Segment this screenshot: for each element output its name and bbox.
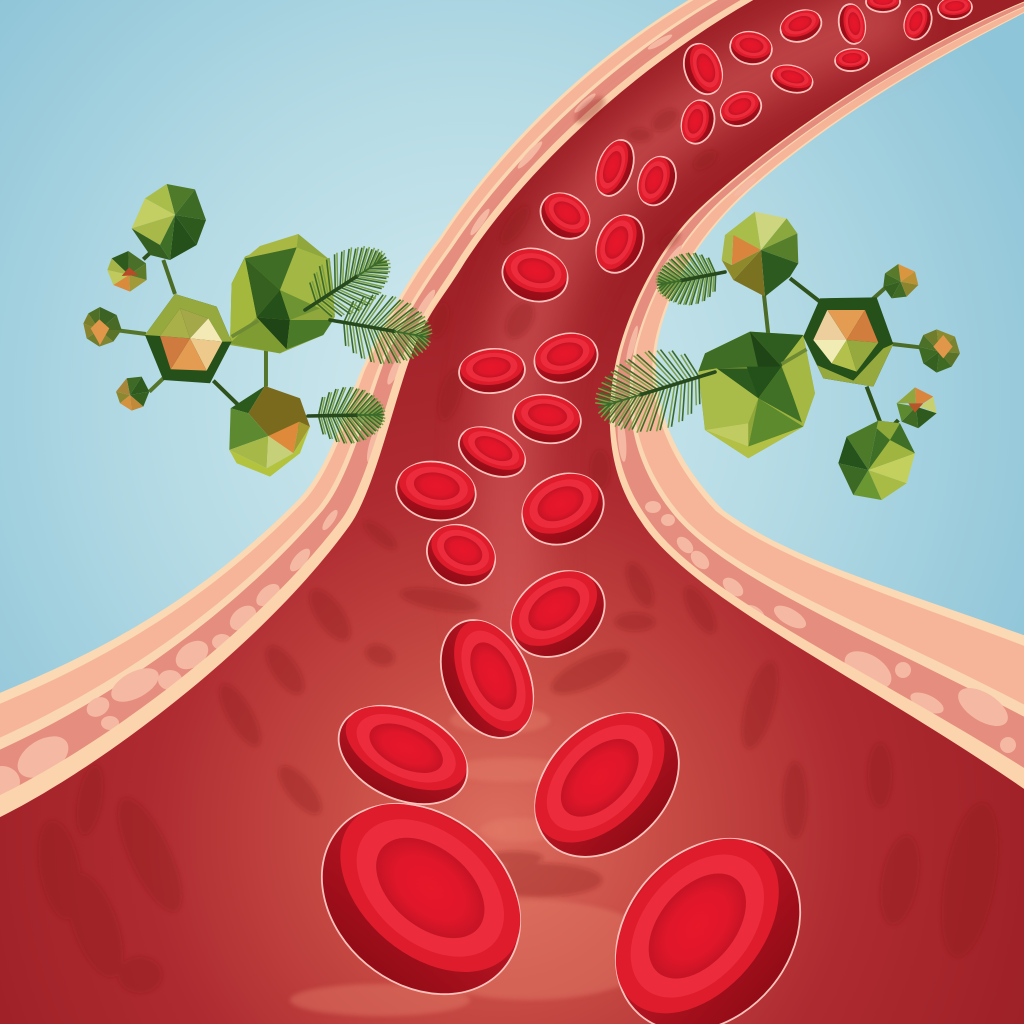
cell 6 bbox=[495, 553, 621, 675]
cell 7 bbox=[511, 460, 615, 558]
cell 3 bbox=[507, 685, 707, 885]
red blood cells bbox=[284, 0, 973, 1024]
cell 20 bbox=[677, 97, 719, 147]
hexagon ring bbox=[145, 294, 232, 383]
ball: large central bbox=[698, 332, 815, 458]
ball: top bbox=[722, 212, 798, 297]
cell 18 bbox=[632, 151, 682, 211]
cell 2 bbox=[578, 802, 838, 1024]
ball: top bbox=[132, 184, 206, 260]
cell 10 bbox=[451, 417, 533, 487]
cell 16 bbox=[532, 184, 598, 248]
ball: small left bbox=[83, 307, 122, 347]
frond: right lower bbox=[585, 334, 727, 446]
cell 14 bbox=[496, 241, 574, 309]
ball: lower right bbox=[838, 421, 915, 500]
hexagon ring bbox=[803, 297, 893, 387]
lumen central glow bbox=[509, 20, 880, 620]
molecule: right bbox=[698, 212, 960, 500]
cell 24 bbox=[776, 5, 826, 47]
bonds bbox=[120, 248, 266, 407]
ball: large central bbox=[230, 234, 335, 353]
ball: small upper right bbox=[883, 264, 918, 298]
cell 9 bbox=[417, 514, 505, 596]
short bond over ball bbox=[232, 321, 258, 337]
ball: small lower bbox=[116, 377, 149, 411]
ball: small lower right bbox=[897, 387, 937, 428]
cell 27 bbox=[900, 1, 936, 43]
cell 17 bbox=[589, 135, 641, 201]
ball: small right bbox=[918, 329, 960, 373]
cell 15 bbox=[587, 208, 653, 280]
cell 12 bbox=[529, 327, 603, 389]
cell 13 bbox=[457, 346, 527, 396]
short bond over ball bbox=[782, 349, 807, 364]
cell 28 bbox=[937, 0, 973, 20]
ball: lower bbox=[229, 386, 310, 477]
ball: small upper bbox=[107, 251, 147, 292]
cell 26 bbox=[834, 48, 870, 72]
cell 5 bbox=[423, 605, 551, 753]
cell 22 bbox=[728, 29, 774, 67]
cell 1 bbox=[284, 764, 558, 1024]
frond: left middle bbox=[324, 286, 437, 372]
cell 21 bbox=[715, 86, 767, 132]
frond: right upper bbox=[651, 247, 730, 311]
cell 23 bbox=[768, 61, 816, 97]
cell 19 bbox=[677, 38, 729, 100]
cell 25 bbox=[836, 2, 868, 46]
cell 8 bbox=[392, 455, 480, 527]
bonds bbox=[764, 278, 920, 431]
frond: left upper bbox=[288, 231, 404, 336]
frond: left lower bbox=[308, 387, 386, 444]
molecule: left bbox=[83, 184, 335, 477]
wall cell patches bbox=[0, 32, 1016, 798]
cell 4 bbox=[323, 686, 483, 824]
cell 11 bbox=[510, 391, 584, 447]
cell 29 bbox=[866, 0, 900, 12]
